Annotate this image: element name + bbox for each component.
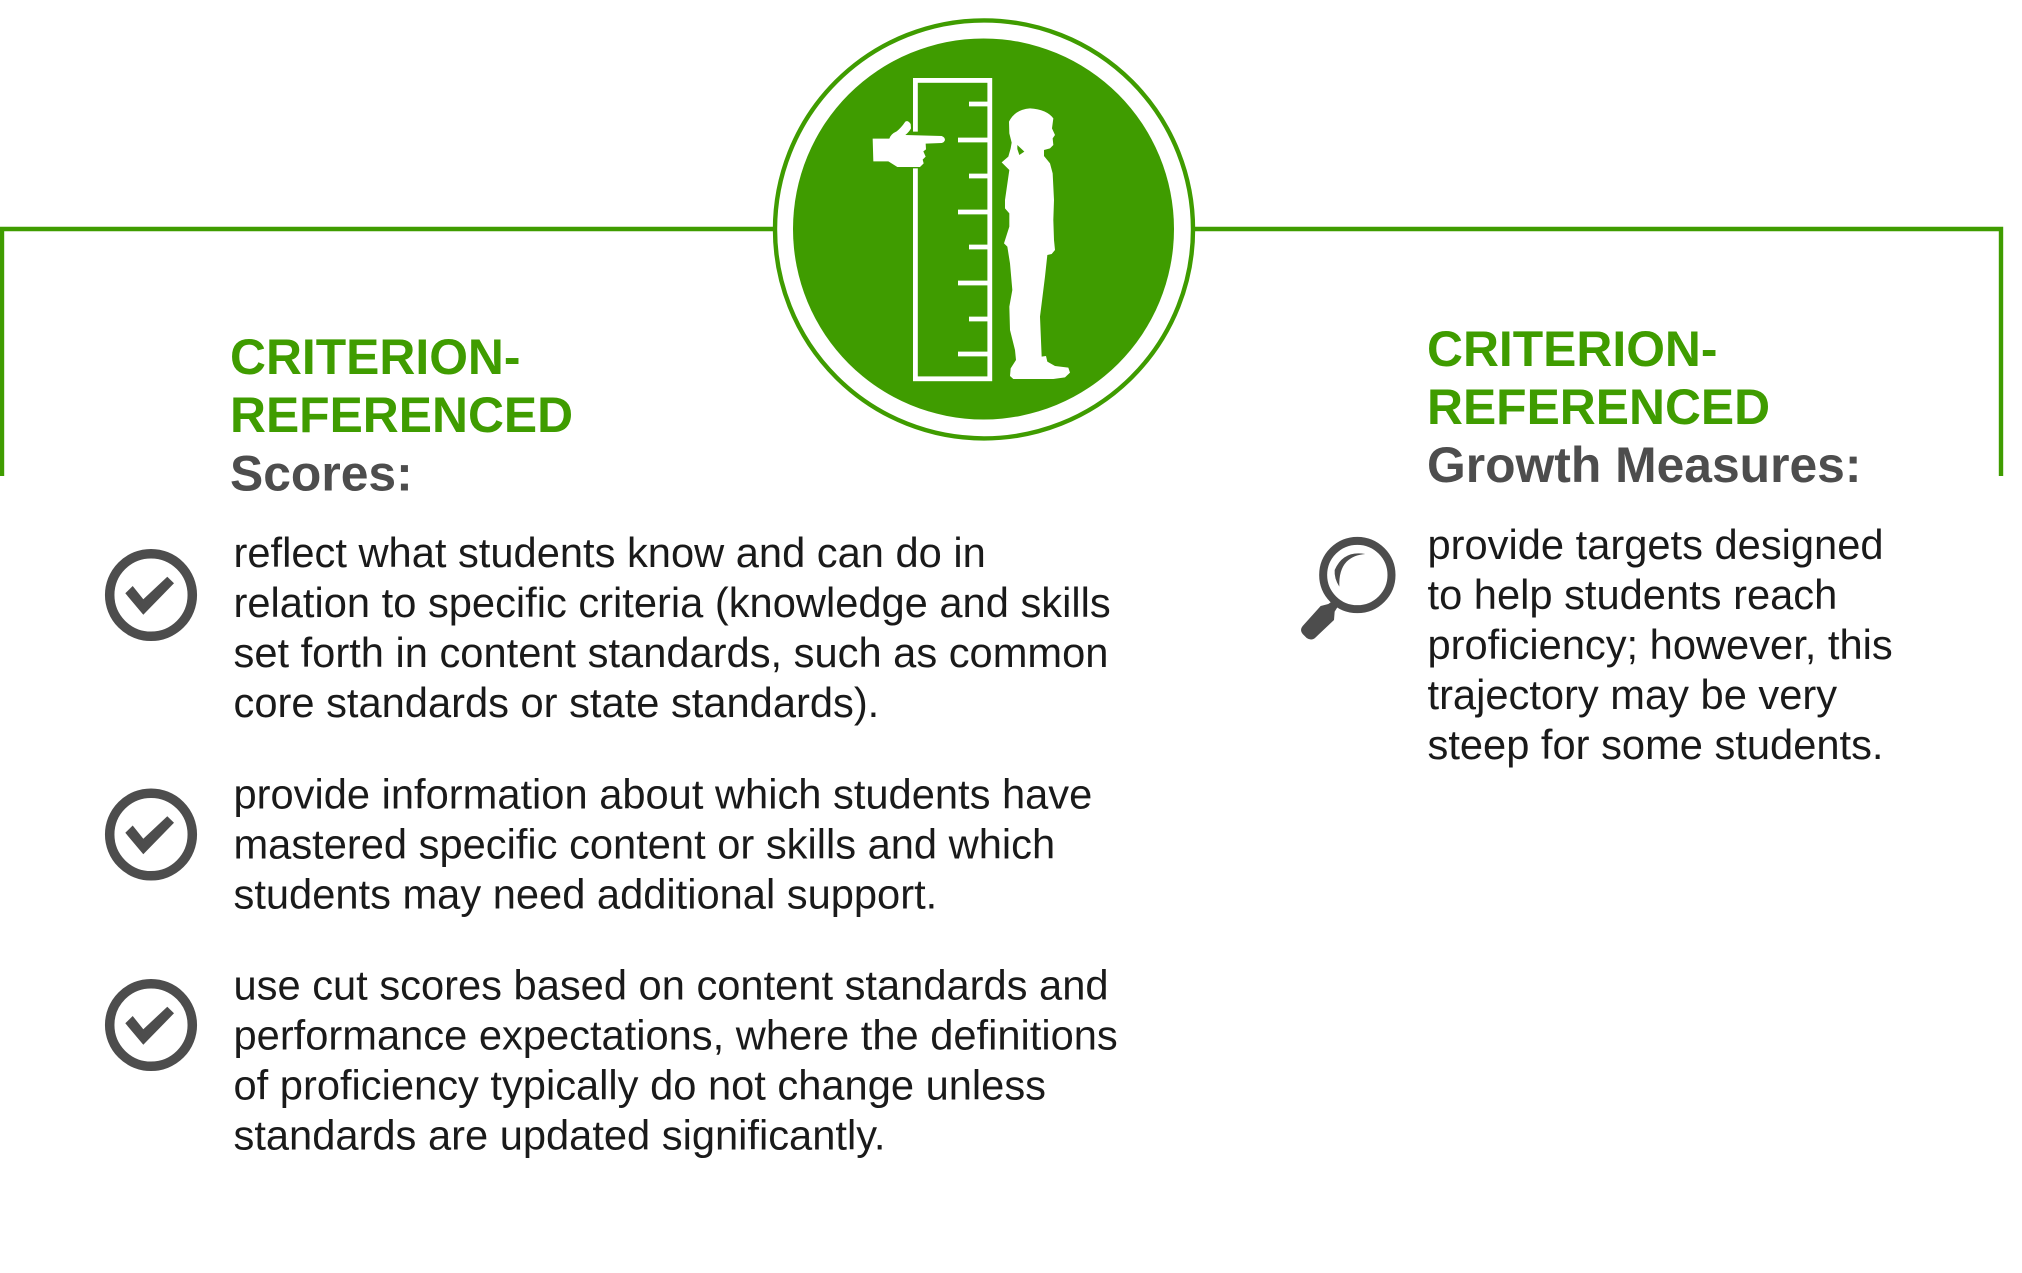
text: right column body: trajectory may be very [1428,671,1837,718]
heading: right column: Growth Measures: [1427,437,1861,493]
text: right column body: proficiency; however, this [1428,621,1893,668]
text: bullet 1: core standards or state standards). [234,679,879,726]
emblem green disk [793,38,1174,420]
heading: left column: Scores: [230,446,413,502]
text: bullet 3: standards are updated significantly. [234,1112,886,1158]
text: bullet 2: provide information about which students have [234,771,1092,818]
text: bullet 3: of proficiency typically do not change unless [234,1062,1046,1108]
text: bullet 2 [234,771,1092,918]
icon: ruler [915,80,990,379]
icon: magnifying glass [1301,541,1391,640]
emblem outer ring [775,20,1193,438]
text: right column body: steep for some students. [1428,721,1883,768]
icon: check 3 [110,984,192,1066]
text: bullet 1: reflect what students know and can do in [234,529,986,576]
right bracket line [1193,229,2001,476]
icon: check 2 [110,793,192,876]
text: bullet 1: relation to specific criteria (knowledge and skills [234,579,1111,626]
central emblem [775,20,1193,438]
text: bullet 3: performance expectations, where the definitions [234,1012,1118,1058]
text: bullet 1: set forth in content standards, such as common [234,629,1108,676]
text: right column body: provide targets designed [1428,521,1884,568]
text: right column body: to help students reach [1428,571,1837,618]
text: bullet 1 [234,529,1111,726]
text: right column body [1428,521,1893,768]
text: bullet 3 [234,962,1118,1158]
heading: left column: CRITERION- [230,329,520,385]
text: bullet 2: mastered specific content or skills and which [234,821,1055,868]
text: bullet 2: students may need additional support. [234,871,937,918]
heading: right column [1427,321,1861,493]
icon: check 1 [110,554,192,636]
heading: right column: CRITERION- [1427,321,1717,377]
icon: child silhouette [1002,108,1070,379]
left bracket line [2,229,775,476]
text: bullet 3: use cut scores based on content standards and [234,962,1109,1008]
icon: pointing hand [873,121,945,168]
heading: left column: REFERENCED [230,387,573,443]
heading: right column: REFERENCED [1427,379,1770,435]
heading: left column [230,329,573,502]
